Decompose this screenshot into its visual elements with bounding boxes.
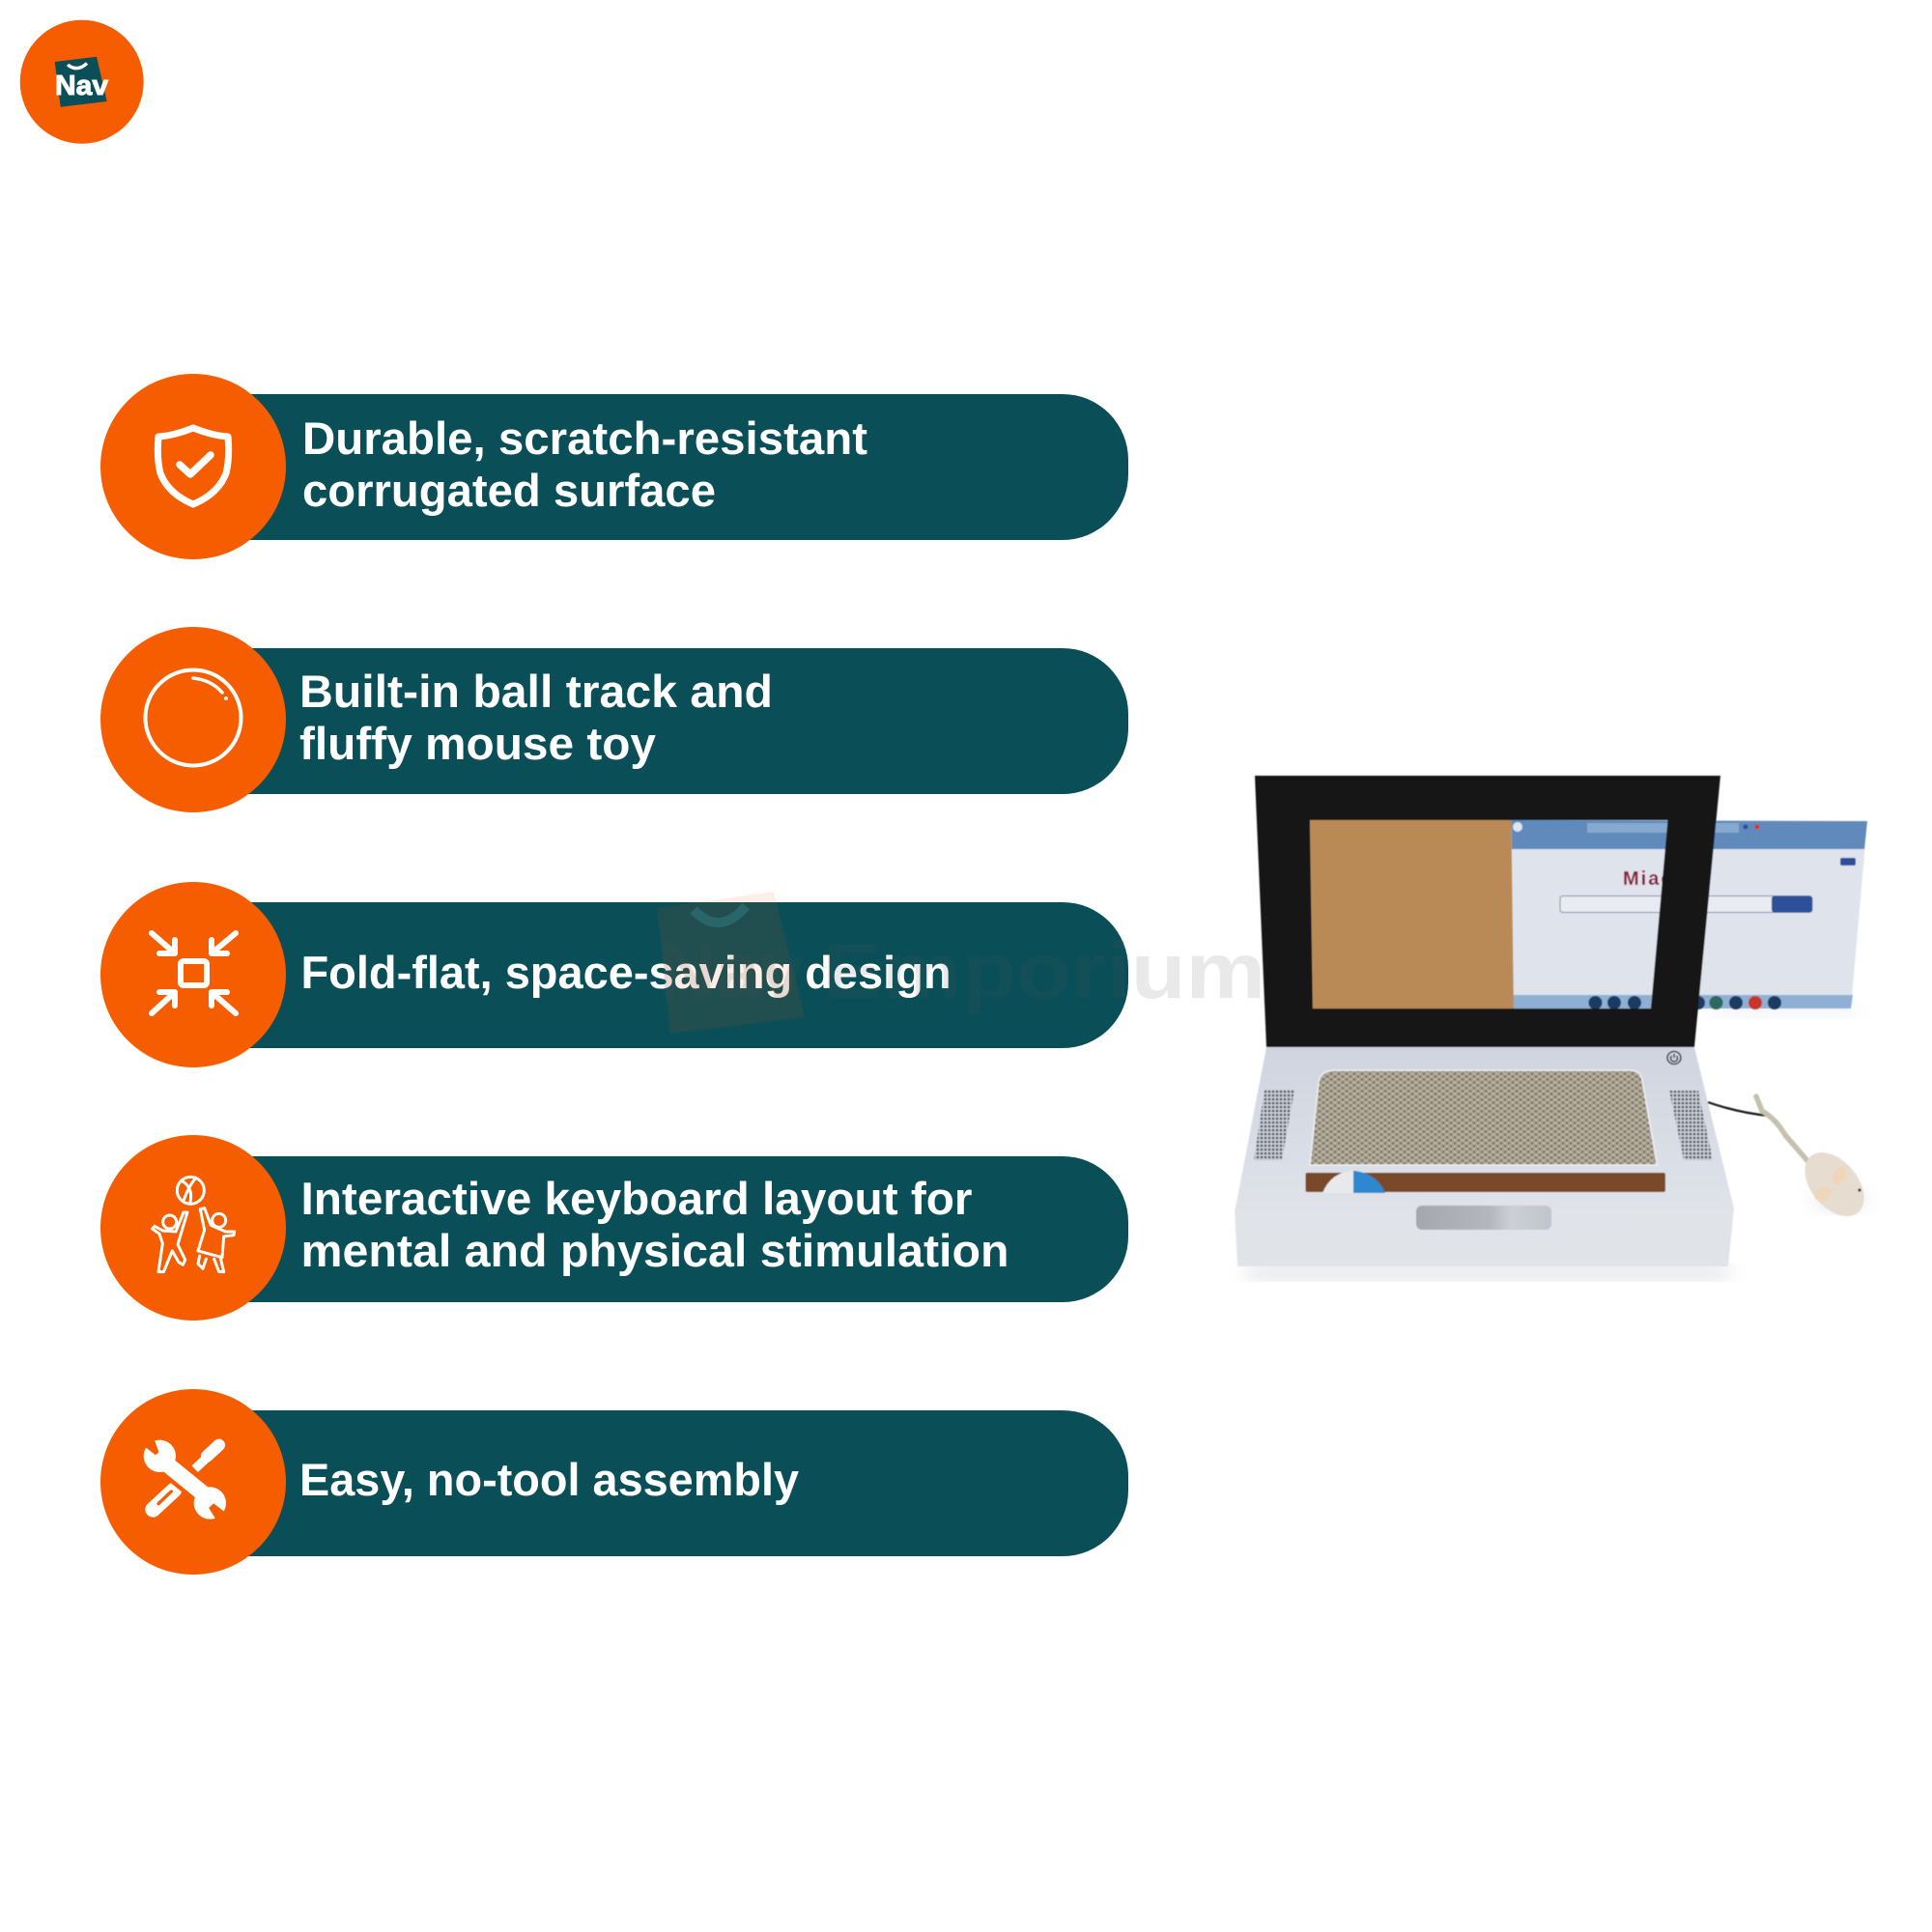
power button [1667,1051,1681,1065]
circle 3 [100,882,286,1067]
left speaker [1254,1090,1294,1160]
text: ball track [299,666,773,769]
text: durable surface: Durable, scratch-resistant [302,412,867,464]
icon: wrench and screwdriver [144,1437,228,1522]
ball slot [1306,1173,1665,1192]
text: interactive keyboard: mental and physical stimulation [301,1225,1009,1276]
feature row 1 [100,374,1128,559]
base top face [1235,1047,1734,1212]
watermark bag [657,892,805,1034]
mouse toy tail [1756,1096,1810,1164]
circle 4 [100,1135,286,1321]
feature row 2 [100,627,1128,812]
circle 5 [100,1389,286,1575]
mouse toy body [1793,1141,1876,1228]
browser dot [1513,822,1522,832]
text: interactive keyboard: Interactive keyboard layout for [301,1173,973,1224]
drawer tab [1416,1206,1551,1230]
search button [1772,896,1812,912]
language tag [1840,858,1856,866]
dock icons [1588,996,1781,1009]
bar 4 [184,1156,1128,1302]
feature row 4 [100,1135,1128,1321]
right speaker [1669,1091,1713,1160]
shadow under the screen [1710,1005,1855,1016]
toy ball [1322,1171,1385,1193]
text: interactive keyboard [301,1173,1009,1276]
logo smile [68,64,87,69]
bar 3 [184,902,1128,1048]
text: fold flat: Fold-flat, space-saving design [301,947,951,998]
watermark emporium text: Emporium [822,927,1265,1015]
icon: shield with check [157,428,229,504]
mouse toy shadow [1811,1188,1869,1211]
text: durable surface [302,412,867,516]
browser header [1511,820,1867,849]
watermark [657,892,1265,1034]
cardboard panel [1310,820,1514,1009]
text: easy assembly: Easy, no-tool assembly [299,1454,799,1505]
feature row 5 [100,1389,1128,1575]
base front face [1235,1208,1734,1266]
search box [1560,896,1812,912]
watermark smile [694,906,746,923]
icon: children playing with ball [153,1177,235,1272]
bar 5 [184,1410,1128,1556]
logo bag [55,57,107,107]
logo badge [20,20,144,144]
shadow under the base [1246,1265,1729,1279]
watermark nav text: Nav [659,927,804,1015]
text: ball track: Built-in ball track and [299,666,773,717]
product: laptop-style cat scratcher [1235,776,1876,1279]
bar 1 [184,394,1128,540]
icon: ball [145,670,242,765]
circle 2 [100,627,286,812]
circle 1 [100,374,286,559]
bottom dock [1513,995,1853,1009]
feature row 3 [100,882,1128,1067]
text: ball track: fluffy mouse toy [299,718,656,769]
mouse toy string [1708,1102,1769,1116]
address bar [1587,823,1682,833]
icon: compress arrows [152,933,236,1013]
page title: Miao [1623,868,1675,890]
text: durable surface: corrugated surface [302,465,716,516]
logo wordmark: Nav [55,71,108,101]
record indicators [1743,825,1748,829]
browser screen [1511,820,1867,1009]
black lid frame [1255,776,1720,1047]
scratch pad [1310,1070,1658,1165]
bar 2 [184,648,1128,794]
